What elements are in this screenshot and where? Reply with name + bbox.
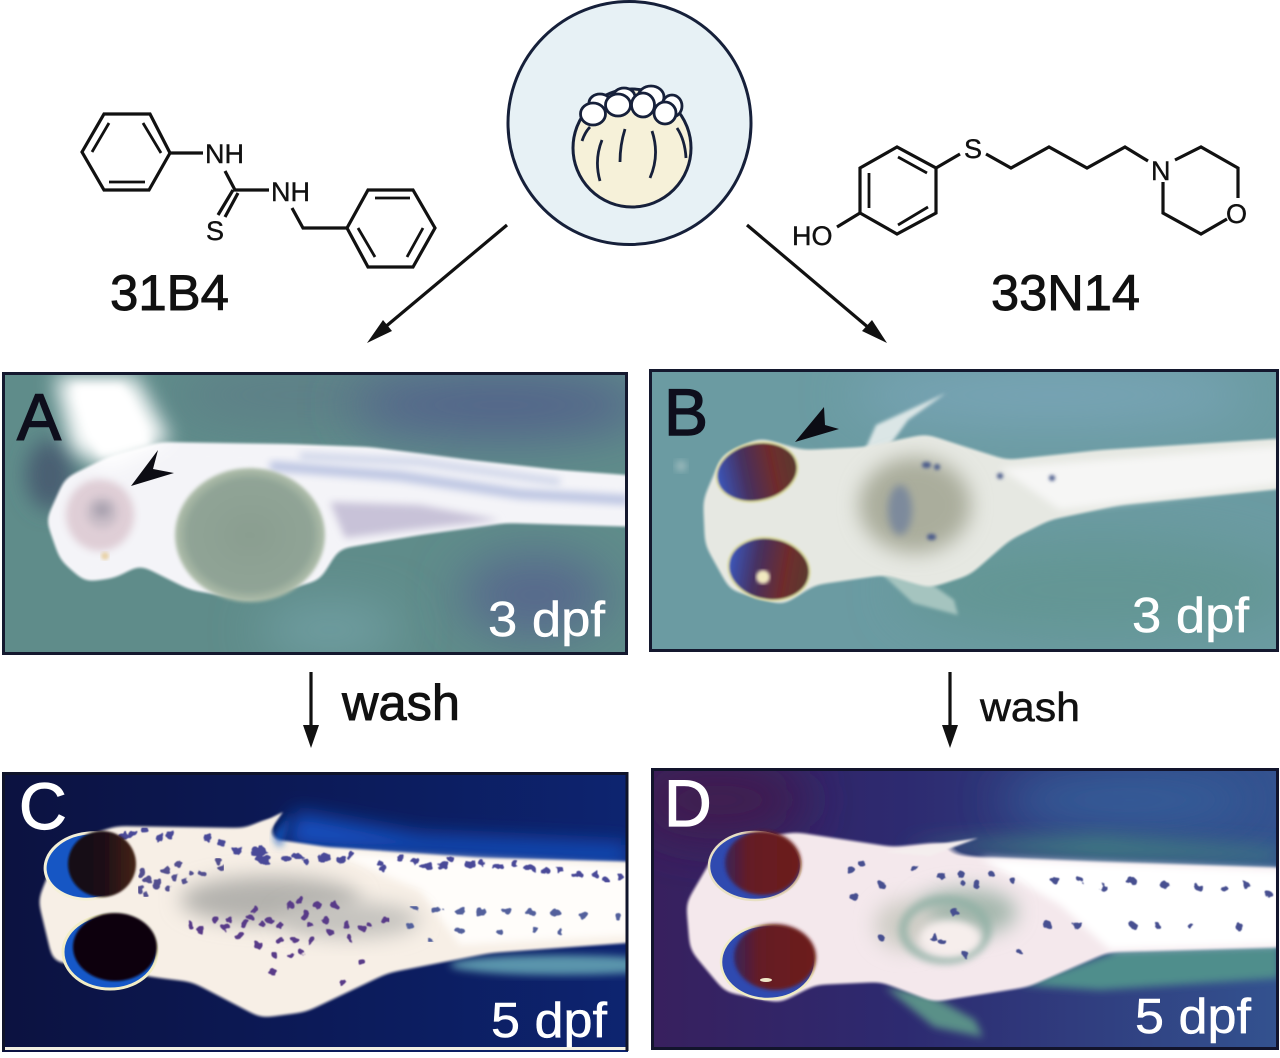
panel D: 33N14 after wash, 5 dpf bbox=[630, 760, 1280, 1050]
panel C: 31B4 after wash, 5 dpf bbox=[2, 769, 670, 1052]
melanocytes D bbox=[851, 863, 1268, 955]
panel B: 33N14 treated larva, 3 dpf bbox=[649, 365, 1280, 652]
chemical structure: 33N14: S bbox=[964, 134, 982, 164]
fin C bbox=[250, 811, 284, 831]
chemical structure: 33N14: N bbox=[1151, 156, 1170, 186]
chemical structure: 33N14 bbox=[792, 134, 1247, 251]
arrow: wash left bbox=[303, 672, 319, 748]
arrowhead B bbox=[795, 407, 839, 442]
age label C: 5 dpf bbox=[491, 994, 607, 1048]
chemical structure: 33N14: HO bbox=[792, 221, 832, 251]
age label D: 5 dpf bbox=[1135, 990, 1251, 1044]
wash label right: wash bbox=[979, 684, 1080, 730]
arrowhead A bbox=[131, 450, 174, 486]
compound label: 31B4: 31B4 bbox=[110, 265, 229, 321]
yolk A bbox=[175, 468, 325, 602]
letter B: B bbox=[664, 375, 708, 449]
chemical structure: 31B4 bbox=[82, 114, 435, 267]
melanocytes C bbox=[122, 830, 620, 880]
chemical structure: 31B4: S bbox=[206, 216, 224, 246]
compound label: 33N14: 33N14 bbox=[991, 265, 1140, 321]
body D bbox=[686, 832, 1280, 1003]
arrow: embryo to panel A bbox=[367, 225, 507, 343]
body C bbox=[38, 812, 640, 1018]
arrow: wash right bbox=[942, 672, 958, 748]
fins B bbox=[864, 393, 946, 452]
chemical structure: 33N14: O bbox=[1226, 199, 1247, 229]
arrow: embryo to panel B bbox=[747, 225, 887, 343]
chemical structure: 31B4: NH bbox=[271, 177, 310, 207]
wash label left: wash bbox=[341, 675, 460, 731]
body B bbox=[703, 434, 1280, 605]
body and head A bbox=[46, 442, 640, 600]
chemical structure: 31B4: NH bbox=[205, 139, 244, 169]
letter C: C bbox=[19, 769, 67, 843]
eyes D bbox=[709, 832, 801, 900]
panel A: 31B4 treated larva, 3 dpf bbox=[2, 370, 650, 655]
age label A: 3 dpf bbox=[488, 593, 605, 647]
fin D bbox=[928, 837, 978, 850]
age label B: 3 dpf bbox=[1132, 589, 1249, 643]
eyes C bbox=[44, 831, 107, 900]
eyes B bbox=[714, 440, 800, 504]
illustration: zebrafish embryo in chorion bbox=[508, 2, 751, 244]
gut ring D bbox=[913, 888, 1017, 936]
light glare bbox=[55, 376, 170, 470]
letter A: A bbox=[17, 380, 61, 454]
letter D: D bbox=[664, 766, 712, 840]
